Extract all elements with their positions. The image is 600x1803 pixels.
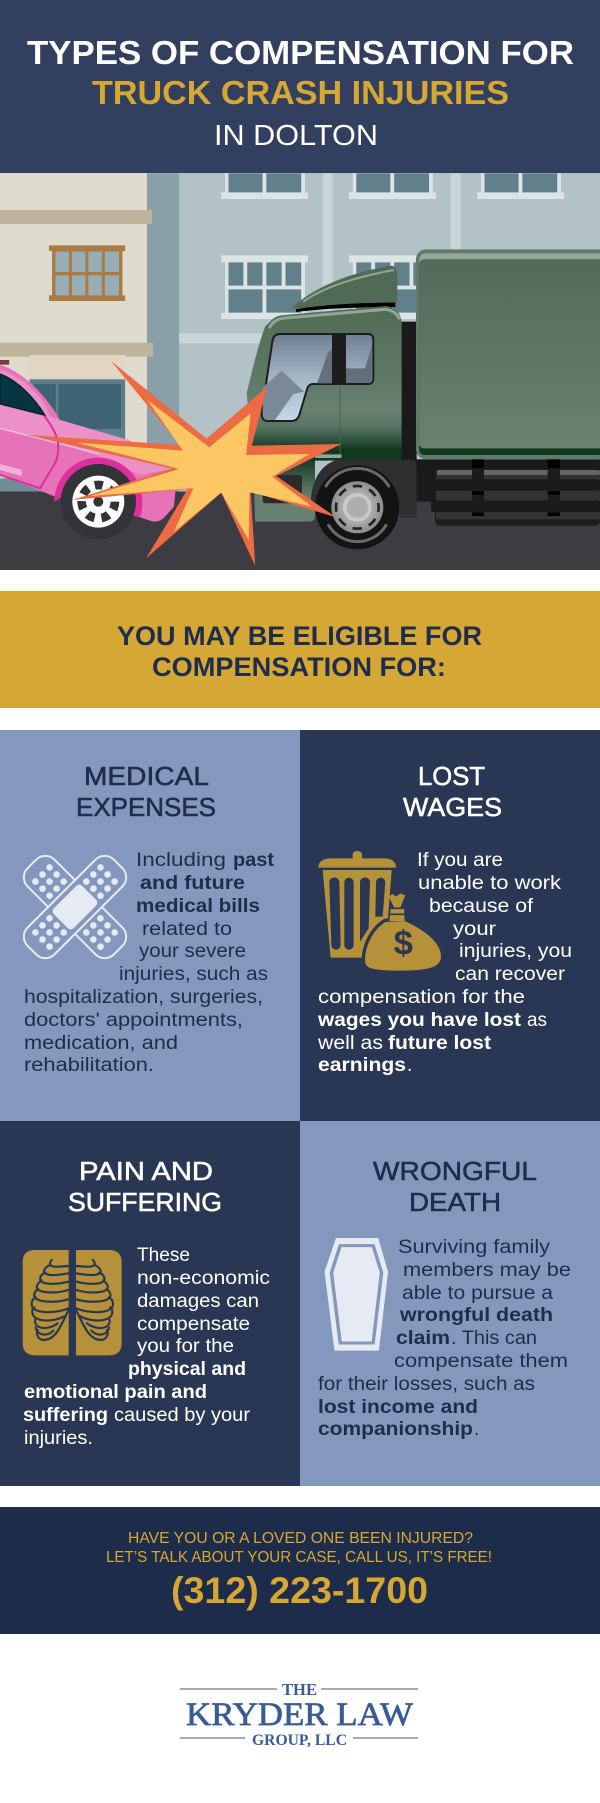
text: medical expenses description: related to — [142, 919, 232, 940]
band heading: COMPENSATION FOR: — [152, 652, 446, 682]
eligibility band — [0, 591, 600, 708]
text: lost wages description: as — [527, 1010, 547, 1031]
heading: lost wages: LOST — [418, 761, 485, 791]
text: medical expenses description: past — [233, 850, 275, 871]
text: lost wages description: If you are — [417, 850, 503, 871]
text: wrongful death description: claim — [396, 1328, 450, 1349]
road — [0, 492, 600, 570]
text: medical expenses description: and future — [140, 873, 245, 894]
text: pain and suffering description: damages can — [137, 1291, 259, 1312]
text: medical expenses description: your severe — [139, 941, 246, 962]
truck chassis and side boxes — [400, 322, 600, 526]
text: pain and suffering description: non-economic — [137, 1268, 270, 1289]
icon: rib cage — [23, 1250, 122, 1355]
text: medical expenses description: medication, and — [24, 1033, 178, 1054]
cargo box — [416, 249, 600, 459]
phone number: (312) 223-1700 — [171, 1570, 428, 1611]
text: pain and suffering description: physical and — [128, 1359, 246, 1380]
title: IN DOLTON — [214, 120, 378, 152]
heading: pain and suffering — [68, 1156, 222, 1217]
title: TRUCK CRASH INJURIES — [92, 74, 509, 111]
text: lost wages description: compensation for the — [318, 987, 525, 1008]
logo: The Kryder Law Group, LLC — [180, 1680, 418, 1749]
text: pain and suffering description: caused by your — [114, 1405, 251, 1426]
logo: The Kryder Law Group, LLC: THE — [282, 1680, 317, 1699]
text: pain and suffering description: emotional pain and — [24, 1382, 207, 1403]
text: pain and suffering description: These — [137, 1245, 190, 1266]
text: pain and suffering description: injuries. — [24, 1428, 93, 1449]
icon: coffin — [325, 1238, 388, 1351]
text: wrongful death description: members may be — [403, 1260, 571, 1281]
call to action text: HAVE YOU OR A LOVED ONE BEEN INJURED? — [128, 1530, 473, 1547]
text: wrongful death description: companionship — [318, 1419, 473, 1440]
heading: lost wages: WAGES — [403, 792, 502, 822]
text: wrongful death description: wrongful death — [399, 1305, 553, 1326]
text: wrongful death description: for their losses, such as — [318, 1374, 535, 1395]
text: medical expenses description: doctors' appointments, — [24, 1010, 243, 1031]
text: lost wages description: earnings — [318, 1055, 406, 1076]
panel: lost wages — [300, 730, 600, 1121]
icon: crossed bandages — [18, 850, 132, 964]
car wheel — [61, 464, 136, 539]
text: lost wages description: future lost — [388, 1033, 492, 1054]
heading: wrongful death: DEATH — [409, 1187, 501, 1217]
text: medical expenses description — [24, 850, 275, 1076]
logo: The Kryder Law Group, LLC: KRYDER LAW — [186, 1697, 414, 1733]
text: medical expenses description: Including — [136, 850, 226, 871]
panel: pain and suffering — [0, 1121, 300, 1486]
text: lost wages description: your — [453, 919, 497, 940]
text: medical expenses description: rehabilitation. — [24, 1055, 154, 1076]
heading: lost wages — [403, 761, 502, 822]
panel: wrongful death — [300, 1121, 600, 1486]
text: pain and suffering description: you for the — [137, 1336, 234, 1357]
call to action text — [106, 1530, 492, 1566]
text: lost wages description: unable to work — [418, 873, 562, 894]
truck wheel — [315, 465, 399, 549]
text: pain and suffering description: compensate — [137, 1314, 250, 1335]
heading: pain and suffering: PAIN AND — [79, 1156, 213, 1186]
text: wrongful death description: Surviving family — [398, 1237, 551, 1258]
text: lost wages description: injuries, you — [459, 941, 572, 962]
text: wrongful death description: compensate them — [394, 1351, 568, 1372]
illustration: truck and car collision — [0, 173, 600, 570]
heading: wrongful death — [373, 1156, 537, 1217]
icon: trash can and money bag: $ — [394, 925, 413, 963]
text: medical expenses description: hospitalization, surgeries, — [24, 987, 263, 1008]
text: wrongful death description — [318, 1237, 571, 1440]
heading: pain and suffering: SUFFERING — [68, 1187, 222, 1217]
text: wrongful death description: lost income and — [318, 1397, 478, 1418]
left beige building — [0, 173, 153, 493]
text: pain and suffering description — [23, 1245, 270, 1449]
title: TYPES OF COMPENSATION FOR — [27, 34, 574, 71]
text: medical expenses description: injuries, such as — [119, 964, 268, 985]
text: wrongful death description: able to pursue a — [402, 1283, 553, 1304]
text: medical expenses description: medical bills — [136, 896, 260, 917]
heading: wrongful death: WRONGFUL — [373, 1156, 537, 1186]
heading: medical expenses: MEDICAL — [84, 761, 209, 791]
fender — [311, 460, 417, 518]
text: lost wages description: well as — [317, 1033, 383, 1054]
text: wrongful death description: . — [474, 1419, 479, 1440]
green truck — [247, 249, 600, 549]
text: lost wages description: . — [407, 1055, 412, 1076]
text: lost wages description: because of — [429, 896, 534, 917]
panel: medical expenses — [0, 730, 300, 1121]
band heading: YOU MAY BE ELIGIBLE FOR — [117, 621, 482, 651]
text: lost wages description: can recover — [455, 964, 566, 985]
header banner — [0, 0, 600, 173]
text: lost wages description — [317, 850, 572, 1076]
icon: trash can and money bag — [318, 851, 443, 972]
explosion burst — [28, 361, 341, 566]
text: wrongful death description: . This can — [451, 1328, 537, 1349]
heading: medical expenses: EXPENSES — [76, 792, 216, 822]
heading: medical expenses — [76, 761, 216, 822]
call to action text: LET’S TALK ABOUT YOUR CASE, CALL US, IT’S FREE! — [106, 1549, 492, 1566]
pink car — [0, 365, 177, 539]
text: lost wages description: wages you have lost — [317, 1010, 522, 1031]
band heading — [117, 621, 482, 682]
logo: The Kryder Law Group, LLC: GROUP, LLC — [252, 1732, 347, 1749]
title — [27, 34, 574, 152]
background building with windows — [147, 173, 564, 493]
cab — [247, 266, 402, 522]
text: pain and suffering description: suffering — [23, 1405, 108, 1426]
call to action band — [0, 1507, 600, 1634]
